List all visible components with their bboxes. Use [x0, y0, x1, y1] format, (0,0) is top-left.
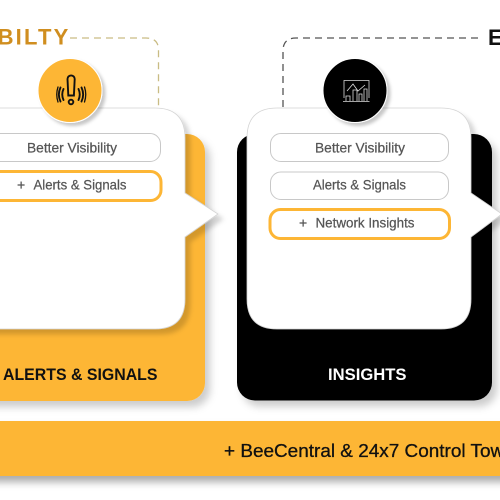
pill: alerts and signals highlighted: + [17, 176, 25, 192]
pill: network insights highlighted: + [299, 214, 307, 230]
pill: alerts and signals [270, 172, 448, 200]
panel: black insights [237, 134, 492, 400]
left column: alerts and signals [0, 24, 218, 401]
icon: insights chart circle [323, 58, 387, 122]
label: insights: INSIGHTS [328, 366, 406, 384]
pill: alerts and signals highlighted: Alerts & Signals [34, 176, 126, 192]
panel: white card left [0, 108, 218, 329]
dashed connector left [70, 38, 158, 110]
dashed connector right [283, 38, 478, 110]
icon: alert circle [38, 58, 102, 122]
pill: network insights highlighted: Network Insights [316, 214, 414, 230]
banner: control tower [0, 421, 500, 476]
pill: better visibility: Better Visibility [27, 140, 117, 156]
pill: network insights highlighted [270, 210, 450, 238]
panel: white card right [247, 108, 500, 329]
pill: alerts and signals: Alerts & Signals [313, 176, 406, 192]
pill: better visibility [0, 134, 160, 162]
pill: better visibility: Better Visibility [315, 140, 405, 156]
pill: better visibility [270, 134, 448, 162]
label: alerts and signals: ALERTS & SIGNALS [3, 366, 158, 384]
panel: orange alerts and signals [0, 134, 205, 401]
pill: alerts and signals highlighted [0, 172, 161, 200]
right column: insights [237, 25, 500, 400]
